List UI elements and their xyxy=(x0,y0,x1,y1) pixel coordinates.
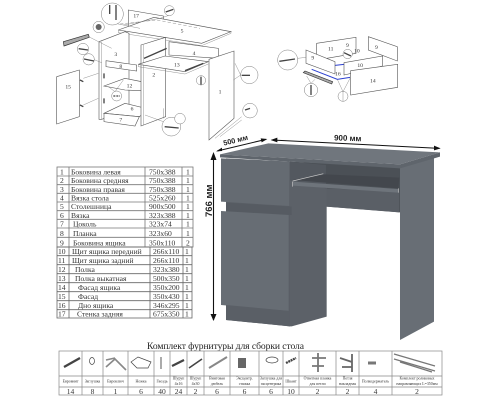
panel 9: drawer left side: 9 xyxy=(311,56,314,62)
hardware names: 4х16 xyxy=(175,382,182,386)
panel 3: left side xyxy=(99,32,129,119)
part numbers, names, sizes and quantities: 13 xyxy=(58,274,66,283)
hardware quantities: 10 xyxy=(287,387,295,396)
part numbers, names, sizes and quantities: Планка xyxy=(73,229,97,238)
panel 2: middle side: 2 xyxy=(152,72,155,78)
part numbers, names, sizes and quantities: 17 xyxy=(58,310,66,318)
dimension: 766 mm xyxy=(204,152,216,321)
hardware names: Полкодержатель xyxy=(362,380,389,384)
dimension: 900 mm: 900 мм xyxy=(334,133,362,143)
part numbers, names, sizes and quantities: 12 xyxy=(58,265,66,274)
hardware names: Заглушка xyxy=(85,380,101,384)
desk product render xyxy=(216,133,441,340)
hardware names xyxy=(63,376,438,386)
part numbers, names, sizes and quantities: 1 xyxy=(186,168,190,176)
hardware names: Ответная планка xyxy=(304,376,332,380)
hardware names: накладная xyxy=(339,382,356,386)
part numbers, names, sizes and quantities: Дно ящика xyxy=(78,301,114,310)
dimension: 900 mm xyxy=(271,133,441,150)
part numbers, names, sizes and quantities: 2 xyxy=(60,176,64,185)
hardware names: 4х30 xyxy=(192,382,199,386)
part numbers, names, sizes and quantities: 1 xyxy=(186,220,190,228)
part rows 1-9 grid xyxy=(57,167,193,247)
part numbers, names, sizes and quantities: Цоколь xyxy=(73,220,97,228)
dimension: 500 mm: 500 мм xyxy=(222,133,249,148)
part numbers, names, sizes and quantities: Вязка xyxy=(71,211,90,220)
panel 8: strip xyxy=(106,61,137,71)
hardware quantities: 8 xyxy=(91,387,95,396)
part numbers, names, sizes and quantities: 1 xyxy=(186,202,190,211)
part numbers, names, sizes and quantities: Щит ящика передний xyxy=(72,247,142,256)
hardware names: Гвоздь xyxy=(156,380,168,384)
hardware quantities: 2 xyxy=(415,387,419,396)
part numbers, names, sizes and quantities: 1 xyxy=(186,176,190,185)
dimension: 500 mm xyxy=(216,133,267,151)
rails and hinges xyxy=(63,15,242,138)
part numbers, names, sizes and quantities: 323х60 xyxy=(149,229,172,238)
part numbers, names, sizes and quantities: 16 xyxy=(58,301,66,310)
part numbers, names, sizes and quantities: 1 xyxy=(185,265,189,274)
part numbers, names, sizes and quantities: 1 xyxy=(186,185,190,194)
part numbers, names, sizes and quantities: 323х74 xyxy=(149,220,172,228)
part numbers, names, sizes and quantities: 6 xyxy=(60,211,64,220)
part numbers, names, sizes and quantities: 1 xyxy=(185,301,189,310)
panel 7: plinth xyxy=(104,113,139,126)
hardware icons xyxy=(64,353,435,372)
desk plinth xyxy=(226,305,290,326)
panel 5: table top: 5 xyxy=(181,28,184,34)
exploded assembly diagram of desk xyxy=(57,3,258,140)
part numbers, names, sizes and quantities: 346х295 xyxy=(153,301,180,310)
desk top xyxy=(220,143,440,168)
part numbers, names, sizes and quantities: 9 xyxy=(60,238,64,248)
dimension: 766 mm: 766 мм xyxy=(204,184,215,217)
part numbers, names, sizes and quantities: 350х110 xyxy=(149,238,175,248)
part numbers, names, sizes and quantities: 1 xyxy=(186,229,190,238)
drawer assembly diagram xyxy=(278,37,398,101)
hardware names: Шуруп xyxy=(190,376,201,380)
part numbers, names, sizes and quantities: 4 xyxy=(60,194,64,202)
drawer front xyxy=(221,158,289,206)
panel 12: shelf: 12 xyxy=(127,83,132,89)
hardware quantities: 2 xyxy=(346,387,350,396)
part numbers, names, sizes and quantities: 1 xyxy=(185,274,189,283)
part numbers, names, sizes and quantities: 7 xyxy=(60,220,64,228)
hardware quantities xyxy=(67,387,419,396)
part numbers, names, sizes and quantities: 750х388 xyxy=(149,185,176,194)
desk right side panel xyxy=(400,156,434,340)
part numbers, names, sizes and quantities: 350х200 xyxy=(153,283,180,292)
part numbers, names, sizes and quantities: 350х430 xyxy=(153,292,180,301)
hardware names: Шуруп xyxy=(173,376,184,380)
hardware names: направляющих L=350мм xyxy=(396,382,438,386)
hardware names: Комплект роликовых xyxy=(400,376,434,380)
hardware quantities: 6 xyxy=(139,387,143,396)
cabinet body backing xyxy=(226,158,290,326)
panel 3: left side: 3 xyxy=(114,52,117,58)
part numbers, names, sizes and quantities: Фасад ящика xyxy=(78,283,121,292)
hardware kit table xyxy=(59,351,442,396)
panel 6: base rail: 6 xyxy=(131,106,134,112)
keyboard shelf xyxy=(293,174,399,193)
hardware quantities: 2 xyxy=(316,387,320,396)
hardware names: для петли xyxy=(309,382,326,386)
part numbers, names, sizes and quantities: 1 xyxy=(185,283,189,292)
hardware names: эксцентрика xyxy=(261,382,281,386)
desk rear interior xyxy=(290,162,400,212)
drawer labels 4 and 30 xyxy=(346,43,360,54)
panel 16: drawer bottom: 16 xyxy=(335,71,341,77)
part numbers, names, sizes and quantities xyxy=(58,168,190,318)
panel 6: base rail xyxy=(104,103,142,117)
part numbers, names, sizes and quantities: 1 xyxy=(60,168,64,176)
drawer labels 4 and 30: 10 xyxy=(354,48,360,54)
drawer labels 4 and 30: 9 xyxy=(346,43,349,49)
part numbers, names, sizes and quantities: 1 xyxy=(185,292,189,301)
hardware names: Винтовая xyxy=(209,376,225,380)
part numbers, names, sizes and quantities: 266х110 xyxy=(153,247,179,256)
hardware names: Ножка xyxy=(136,380,147,384)
part numbers, names, sizes and quantities: 1 xyxy=(186,211,190,220)
part numbers, names, sizes and quantities: 15 xyxy=(58,292,66,301)
detail callout circles xyxy=(77,3,258,136)
panel 11: drawer back: 11 xyxy=(328,46,334,52)
door front xyxy=(221,211,289,311)
part numbers, names, sizes and quantities: Боковина ящика xyxy=(73,238,126,248)
part numbers, names, sizes and quantities: 1 xyxy=(185,310,189,318)
hardware quantities: 6 xyxy=(215,387,219,396)
part numbers, names, sizes and quantities: Полка выкатная xyxy=(75,274,127,283)
panel 4: table rail: 4 xyxy=(193,51,196,57)
desk modesty panel xyxy=(326,188,399,212)
hardware quantities: 6 xyxy=(269,387,273,396)
part numbers, names, sizes and quantities: 8 xyxy=(60,229,64,238)
hardware quantities: 6 xyxy=(243,387,247,396)
part numbers, names, sizes and quantities: 900х500 xyxy=(149,202,176,211)
hardware quantities: 14 xyxy=(67,387,74,396)
panel 13: pull-out shelf: 13 xyxy=(174,62,180,68)
part numbers, names, sizes and quantities: 500х350 xyxy=(153,274,180,283)
part numbers, names, sizes and quantities: Стенка задняя xyxy=(77,310,123,318)
desk inner side xyxy=(289,180,327,326)
part numbers, names, sizes and quantities: 5 xyxy=(60,202,64,211)
panel 2: middle side xyxy=(141,37,166,126)
hardware quantities: 2 xyxy=(194,387,198,396)
part numbers, names, sizes and quantities: 323х388 xyxy=(149,211,176,220)
hardware names: Евровинт xyxy=(63,380,79,384)
hardware names: стяжка xyxy=(239,382,250,386)
panel 17: back panel: 17 xyxy=(133,13,139,19)
part numbers, names, sizes and quantities: 10 xyxy=(58,247,66,256)
part numbers, names, sizes and quantities: Щит ящика задний xyxy=(72,256,134,265)
hardware quantities: 24 xyxy=(175,387,182,396)
part numbers, names, sizes and quantities: Вязка стола xyxy=(71,194,109,202)
rail behind door xyxy=(226,203,292,215)
part numbers, names, sizes and quantities: 14 xyxy=(58,283,66,292)
part numbers, names, sizes and quantities: 3 xyxy=(60,185,64,194)
parts list table xyxy=(57,167,193,318)
panel 14: drawer facade: 14 xyxy=(370,79,376,85)
part numbers, names, sizes and quantities: 2 xyxy=(186,238,190,248)
hardware names: Эксцентр. xyxy=(236,376,253,380)
part numbers, names, sizes and quantities: Боковина левая xyxy=(71,168,121,176)
hardware kit heading: Комплект фурнитуры для сборки стола xyxy=(147,341,305,352)
part numbers, names, sizes and quantities: 525х260 xyxy=(149,194,176,202)
part numbers, names, sizes and quantities: 11 xyxy=(58,256,66,265)
hardware names: Шкант xyxy=(285,380,297,384)
part rows 10-17 grid xyxy=(57,247,192,318)
panel 1: right side xyxy=(209,51,234,140)
panel 5: table top xyxy=(118,17,231,46)
part numbers, names, sizes and quantities: Боковина средняя xyxy=(71,176,129,185)
panel 12: shelf xyxy=(104,78,142,91)
panel 9: drawer right side: 9 xyxy=(375,45,378,51)
panel 1: right side: 1 xyxy=(219,89,222,95)
panel 13: pull-out shelf xyxy=(138,56,208,74)
part numbers, names, sizes and quantities: 266х110 xyxy=(153,256,179,265)
hardware grid xyxy=(59,351,442,395)
hardware names: дюбель xyxy=(211,382,223,386)
hardware quantities: 4 xyxy=(374,387,378,396)
part numbers, names, sizes and quantities: 1 xyxy=(186,194,190,202)
part numbers, names, sizes and quantities: Фасад xyxy=(78,292,98,301)
panel 15: door: 15 xyxy=(65,84,71,90)
panel 15: door xyxy=(57,70,79,124)
panel 8: strip: 8 xyxy=(119,64,122,70)
part numbers, names, sizes and quantities: 675х350 xyxy=(153,310,180,318)
panel 10: drawer front board: 10 xyxy=(357,63,363,69)
part numbers, names, sizes and quantities: Столешница xyxy=(71,202,112,211)
hardware names: Заглушка для xyxy=(260,376,282,380)
part numbers, names, sizes and quantities: 750х388 xyxy=(149,168,176,176)
part numbers, names, sizes and quantities: 1 xyxy=(185,256,189,265)
hardware quantities: 40 xyxy=(158,387,166,396)
part numbers, names, sizes and quantities: 323х380 xyxy=(153,265,180,274)
part numbers, names, sizes and quantities: Полка xyxy=(75,265,96,274)
drawer callouts xyxy=(278,49,352,101)
part numbers, names, sizes and quantities: 1 xyxy=(185,247,189,256)
part numbers, names, sizes and quantities: Боковина правая xyxy=(71,185,125,194)
hardware names: Евроключ xyxy=(107,380,124,384)
hardware names: Петля xyxy=(343,376,353,380)
panel 4: table rail xyxy=(169,42,218,58)
hardware quantities: 1 xyxy=(114,387,118,396)
panel 7: plinth: 7 xyxy=(119,117,122,123)
part numbers, names, sizes and quantities: 750х388 xyxy=(149,176,176,185)
panel 17: back panel xyxy=(128,10,163,30)
